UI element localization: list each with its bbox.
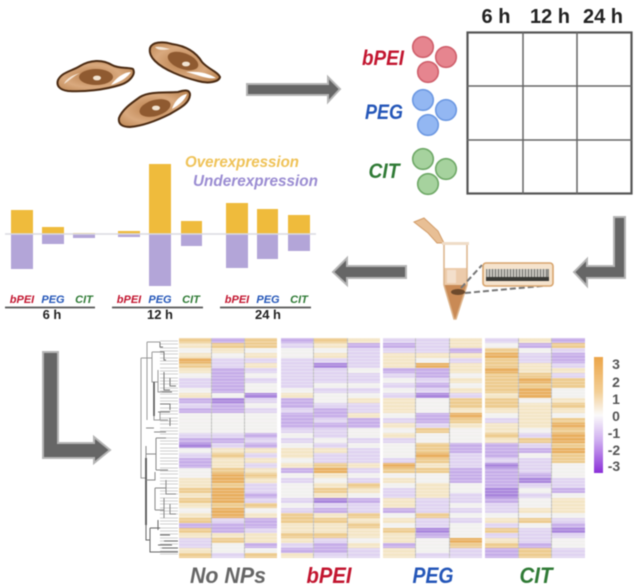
colour scale labels: -2	[608, 442, 620, 458]
arrow: cells to nanoparticle treatment	[247, 77, 340, 102]
time header: 6 h: 6 h	[482, 6, 510, 28]
nanoparticle label: PEG: PEG	[365, 101, 403, 124]
nanoparticles: bPEI	[413, 37, 456, 82]
colour scale labels: -3	[608, 458, 620, 474]
treatment grid	[467, 32, 632, 194]
icon: microcentrifuge tube	[414, 218, 469, 319]
bar labels: 12 h group: bPEI	[117, 294, 142, 306]
bar labels: 12 h group: CIT	[182, 294, 201, 306]
arrow: grid to tube	[574, 217, 625, 286]
nanoparticle label: CIT: CIT	[368, 160, 401, 183]
colour scale labels	[608, 356, 620, 474]
bar labels: 24 h group: PEG	[256, 294, 280, 306]
bar labels: 6 h group: PEG	[41, 294, 65, 306]
bar labels: 24 h group: 24 h	[255, 307, 281, 322]
legend: underexpression: Underexpression	[193, 173, 318, 190]
heatmap	[178, 338, 586, 559]
legend: overexpression: Overexpression	[185, 154, 299, 171]
cell bottom	[119, 90, 190, 127]
heatmap group: No NPs	[179, 338, 277, 558]
heatmap group: PEG	[383, 338, 482, 558]
bar labels: 6 h group: CIT	[75, 294, 94, 306]
bar labels: 12 h group	[112, 294, 203, 322]
heatmap group: bPEI	[281, 338, 380, 558]
arrow: tube to bar chart	[333, 258, 406, 285]
overexpression bars	[11, 164, 310, 234]
bar labels: 6 h group: bPEI	[10, 294, 35, 306]
cell left	[57, 61, 134, 91]
bar labels: 24 h group	[220, 294, 311, 322]
bar chart	[5, 164, 316, 286]
colour scale labels: 1	[612, 391, 620, 407]
colour scale labels: -1	[608, 425, 620, 441]
colour scale labels: 2	[612, 374, 620, 390]
nanoparticles: PEG	[413, 90, 456, 135]
bar labels: 12 h group: PEG	[148, 294, 172, 306]
bar labels: 12 h group: 12 h	[147, 307, 173, 322]
icon: cells	[57, 42, 220, 127]
time header: 12 h: 12 h	[530, 6, 570, 28]
colour scale labels: 3	[612, 356, 620, 372]
colour scale labels: 0	[612, 408, 620, 424]
heatmap group: CIT	[485, 338, 585, 558]
underexpression bars	[11, 234, 310, 286]
bar labels: 6 h group: 6 h	[43, 307, 61, 322]
nanoparticle label: bPEI: bPEI	[362, 47, 405, 70]
icon: microarray chip	[483, 263, 553, 286]
colour scale bar	[594, 357, 603, 473]
bar labels: 24 h group: bPEI	[225, 294, 250, 306]
arrow: bar chart to heatmap	[43, 352, 110, 463]
time header: 24 h: 24 h	[583, 6, 623, 28]
nanoparticles: CIT	[413, 149, 456, 194]
bar labels: 24 h group: CIT	[290, 294, 309, 306]
cell right	[150, 42, 220, 82]
dendrogram	[141, 341, 178, 554]
dashed zoom lines	[461, 265, 553, 293]
bar labels: 6 h group	[5, 294, 95, 322]
